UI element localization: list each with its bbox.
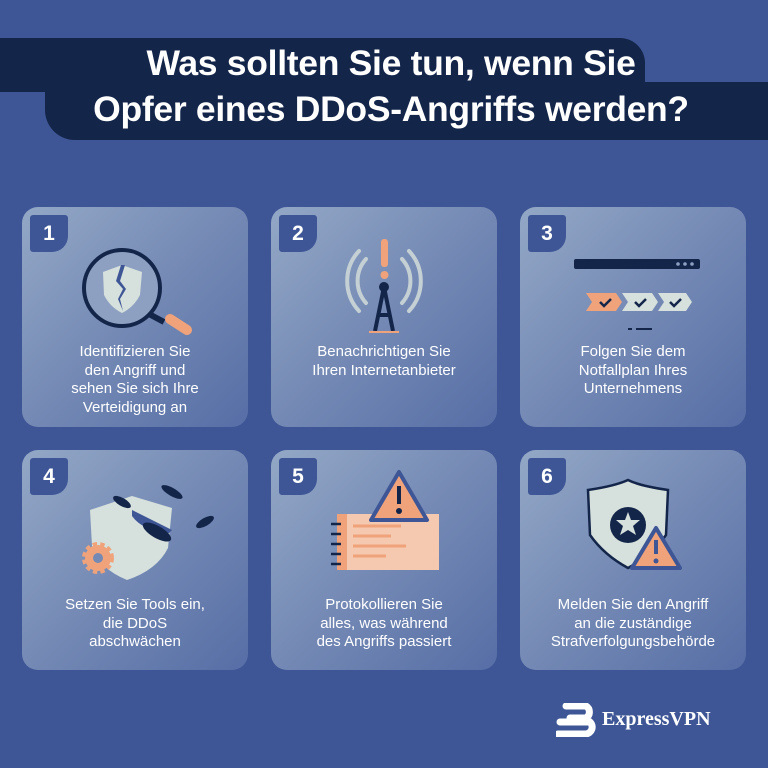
title text [93,43,689,129]
panel 1: Identifizieren Sie [80,343,190,360]
panel 5: des Angriffs passiert [317,633,451,650]
icon: police badge with warning [586,478,682,570]
panel 5: Protokollieren Sie [325,596,443,613]
panel 6: Strafverfolgungsbehörde [551,633,715,650]
panel 6 [520,450,746,670]
title banner [0,38,768,140]
logo: ExpressVPN: ExpressVPN [602,708,711,730]
icon: plan steps [574,259,700,330]
panel 4: abschwächen [89,633,181,650]
panel 3: Notfallplan Ihres [579,362,687,378]
panel 5: 5 [292,465,304,488]
panel 1: den Angriff und [85,362,185,378]
panel 3 [520,207,746,427]
panel 4: die DDoS [103,614,167,632]
logo: ExpressVPN [556,703,711,737]
title text: Was sollten Sie tun, wenn Sie [146,43,636,83]
panel 6: Melden Sie den Angriff [558,596,708,613]
panel 2: Benachrichtigen Sie [317,343,451,360]
panel 2: 2 [292,222,304,245]
panel 5: alles, was während [320,614,448,632]
panel 4 [22,450,248,670]
panel 4: 4 [43,465,55,488]
icon: log with warning [331,470,439,570]
icon: shield with bullets and gear [82,485,214,580]
panel 5 [271,450,497,670]
panel 2 [271,207,497,427]
panel 3: Folgen Sie dem [580,343,686,360]
panel 3: Unternehmens [584,380,682,397]
panel 4: Setzen Sie Tools ein, [65,596,205,613]
panel 1: Verteidigung an [83,398,187,416]
panel 3: 3 [541,222,553,245]
title text: Opfer eines DDoS-Angriffs werden? [93,89,689,129]
panel 2: Ihren Internetanbieter [312,362,456,378]
panel 1: sehen Sie sich Ihre [71,380,199,397]
panel 6: an die zuständige [574,614,692,632]
icon: magnifier shield [82,248,192,335]
icon: antenna tower [345,239,423,333]
panel 6: 6 [541,465,553,488]
panel 1 [22,207,248,427]
panel 1: 1 [43,222,55,245]
